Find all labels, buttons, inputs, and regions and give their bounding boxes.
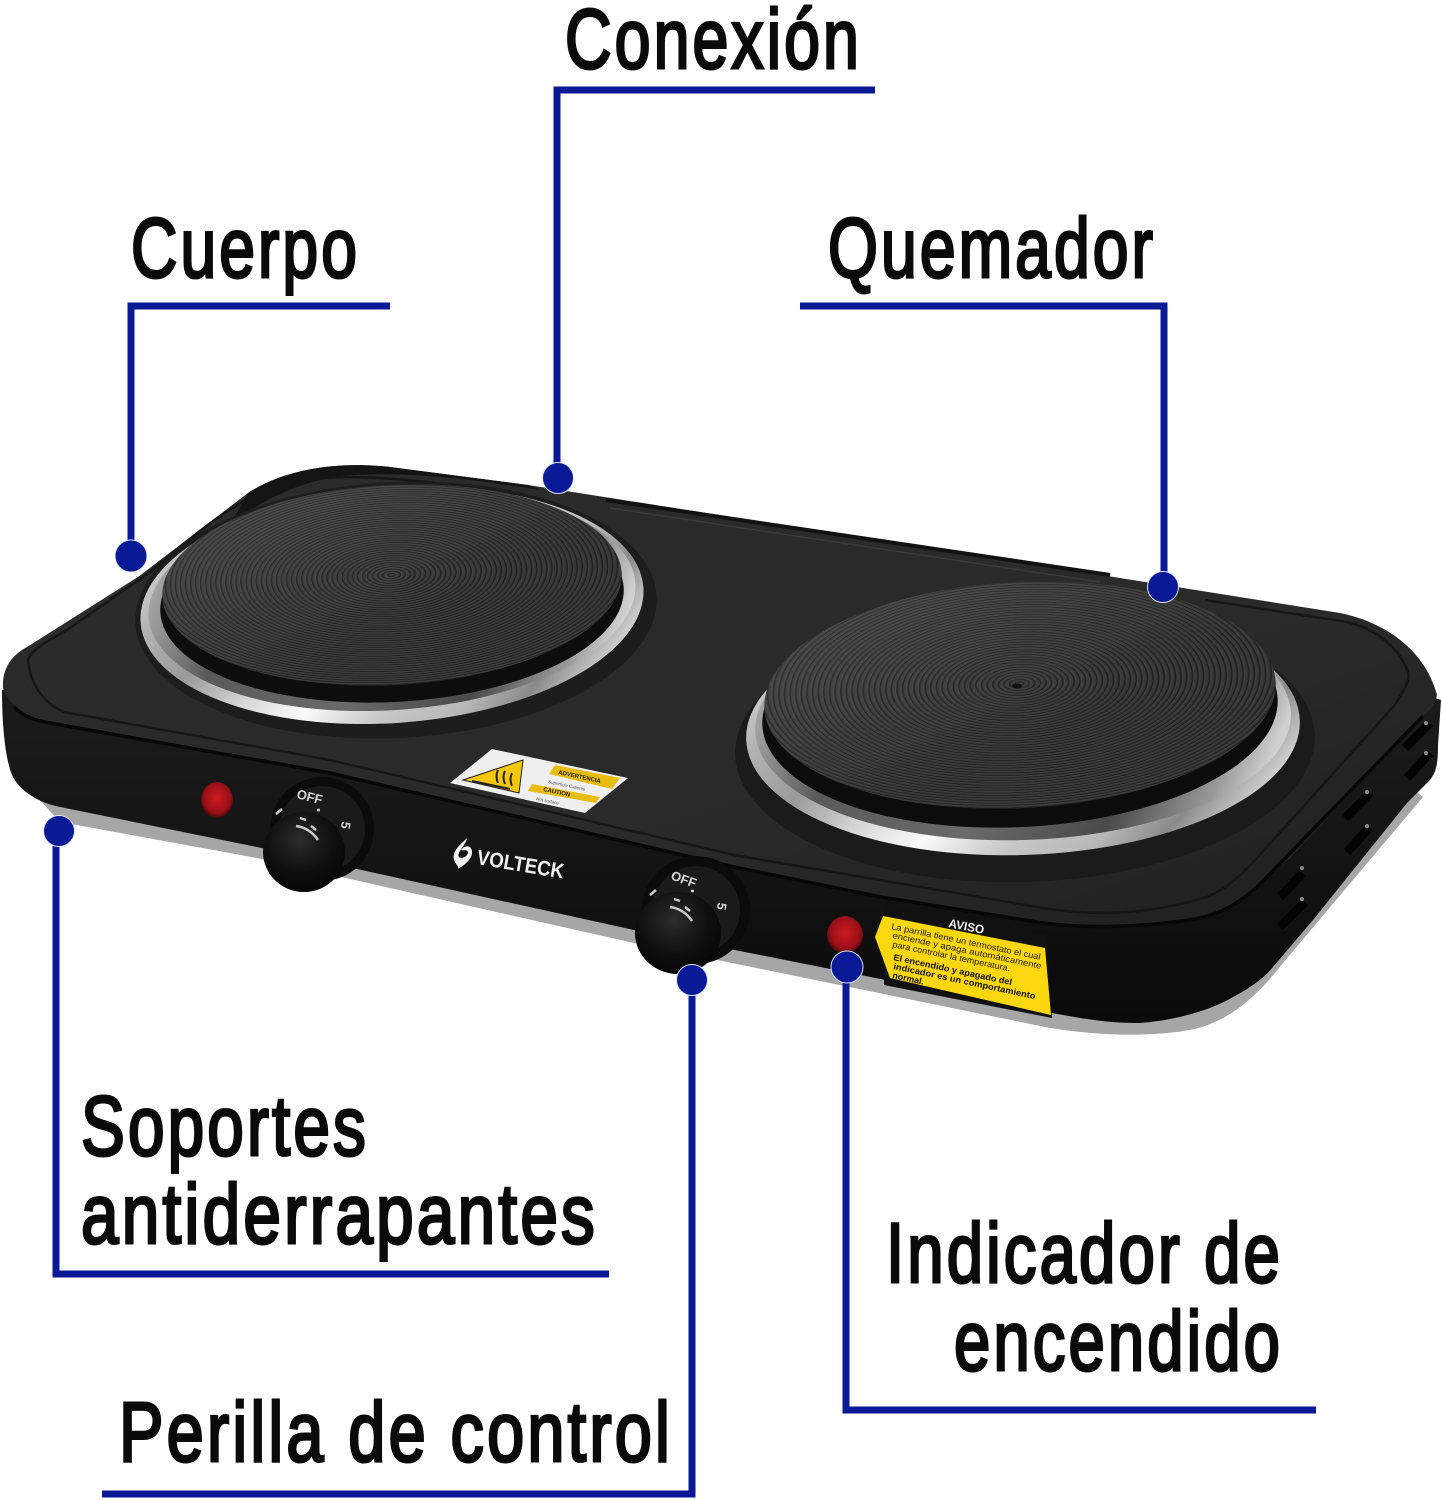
label Cuerpo: Cuerpo (131, 201, 360, 295)
marker Indicador (831, 951, 863, 983)
notice text: enciende y apaga automáticamente (892, 930, 1043, 971)
marker Soportes (44, 816, 74, 846)
label Soportes antiderrapantes: Soportes (81, 1079, 369, 1173)
leader line Conexión (557, 90, 875, 478)
warning sticker (450, 749, 628, 813)
plate side left (155, 486, 629, 714)
steel drip ring right (742, 595, 1304, 865)
notice text: El encendido y apagado del (893, 952, 1013, 987)
AVISO sticker (875, 903, 1052, 1018)
plate sheen right (758, 569, 1282, 821)
callout: Quemador (800, 201, 1178, 602)
logo wordmark: VOLTECK (475, 846, 566, 883)
hazard triangle (463, 760, 523, 793)
control knob left: 5 (338, 820, 354, 830)
steel drip ring left (132, 470, 652, 740)
body top surface (3, 465, 1437, 927)
logo swirl icon (454, 838, 472, 869)
control knob right: 5 (714, 901, 730, 911)
indicator light left (201, 782, 233, 818)
leader line Indicador (846, 967, 1316, 1410)
recess around left burner (129, 469, 663, 751)
notice text: indicador es un comportamiento (893, 961, 1037, 1001)
marker Quemador (1148, 572, 1178, 602)
label Indicador de encendido: encendido (954, 1294, 1283, 1388)
recess around right burner (730, 598, 1320, 892)
inner steel shade left (141, 473, 643, 727)
marker Cuerpo (115, 540, 147, 572)
dark lip under top surface (14, 707, 1423, 927)
plate surface right (758, 569, 1282, 821)
leader line Quemador (800, 306, 1164, 587)
callout: Soportes antiderrapantes (44, 816, 609, 1274)
plate sheen left (157, 473, 627, 697)
marker Perilla (676, 964, 708, 996)
leader line Perilla (102, 980, 692, 1494)
raised rim on top surface (28, 477, 1408, 913)
product: hot plate (2, 465, 1441, 1035)
brand logo (454, 838, 566, 883)
sticker text: Hot surface (536, 796, 560, 806)
marker Conexión (542, 462, 574, 494)
notice text: normal. (892, 970, 925, 987)
leader line Cuerpo (131, 306, 390, 556)
sticker text: ADVERTENCIA (558, 770, 602, 785)
leader line Soportes (56, 831, 609, 1274)
label Perilla de control: Perilla de control (119, 1385, 673, 1479)
control knob left (263, 777, 374, 892)
control knob right (635, 856, 750, 974)
sticker text: Superficie Caliente (548, 779, 586, 792)
ventilation slots (1280, 723, 1430, 927)
label Soportes antiderrapantes (81, 1079, 598, 1261)
callout: Perilla de control (102, 964, 708, 1494)
yellow notice panel (875, 916, 1051, 1015)
label Soportes antiderrapantes: antiderrapantes (81, 1167, 598, 1261)
notice text: La parrilla tiene un termostato el cual (891, 921, 1042, 962)
knob marks: OFF (295, 786, 324, 807)
inner steel shade right (751, 595, 1295, 849)
label Indicador de encendido: Indicador de (886, 1206, 1283, 1300)
knob marks: OFF (669, 868, 699, 891)
notice heading: AVISO (947, 916, 985, 937)
sticker text (536, 770, 602, 806)
burner left (129, 469, 663, 751)
callout: Conexión (542, 0, 875, 494)
sticker text: CAUTION (543, 787, 571, 799)
notice text (891, 921, 1043, 1001)
plate centre dot (1012, 684, 1022, 688)
body front and side faces (2, 600, 1441, 1023)
grey base with antislip supports (12, 700, 1423, 1035)
callout: Indicador de encendido (831, 951, 1316, 1410)
notice text: para controlar la temperatura. (892, 939, 1011, 973)
label Quemador: Quemador (828, 201, 1156, 295)
plate side right (756, 584, 1284, 840)
indicator light right (827, 916, 863, 954)
back rim shadow (230, 465, 540, 525)
label Indicador de encendido (886, 1206, 1283, 1388)
callout: Cuerpo (115, 201, 390, 572)
plate surface left (157, 473, 627, 697)
burner right (730, 569, 1320, 892)
